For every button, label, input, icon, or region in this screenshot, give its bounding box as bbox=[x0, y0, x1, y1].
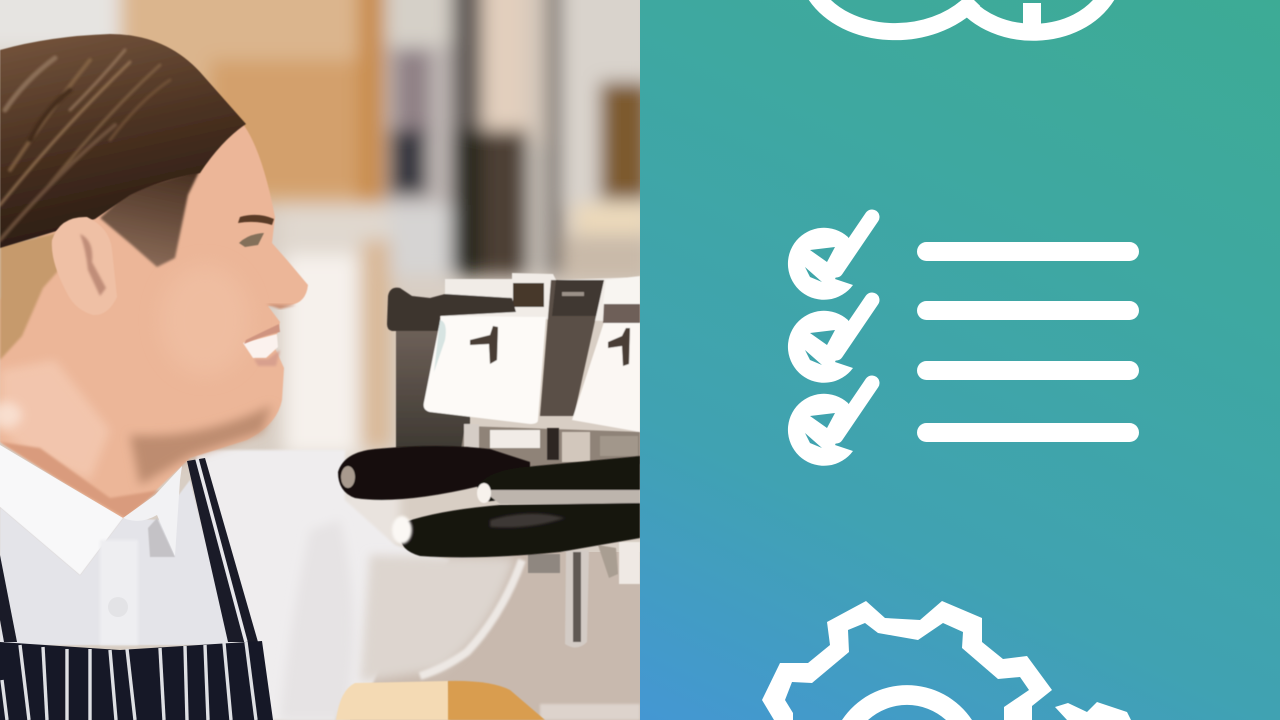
orange item at bottom bbox=[448, 681, 545, 720]
group heads bbox=[461, 426, 640, 468]
machine top chrome bbox=[445, 273, 640, 322]
goggle arcs bbox=[815, 0, 1108, 32]
icon: small gear fragment bbox=[1055, 702, 1131, 720]
icon: large gear cropped at bottom bbox=[762, 601, 1052, 720]
lower right tone bbox=[540, 704, 640, 720]
cream item at bottom bbox=[336, 681, 450, 720]
espresso machine bbox=[387, 273, 640, 468]
right collar bbox=[123, 466, 182, 556]
machine dark body bbox=[396, 328, 470, 448]
apron bib with pinstripes bbox=[0, 641, 273, 720]
gear hub ring bbox=[842, 685, 972, 720]
ear bbox=[52, 217, 117, 315]
small fittings bbox=[528, 554, 560, 573]
handle 2 bbox=[477, 456, 640, 502]
left collar bbox=[0, 445, 123, 575]
eye bbox=[239, 233, 264, 247]
icon: checklist with lines bbox=[788, 217, 1139, 466]
hair bbox=[0, 34, 246, 248]
barista figure bbox=[0, 34, 308, 720]
checklist lines bbox=[917, 242, 1139, 442]
portafilter handles bbox=[338, 446, 640, 557]
panel: photo of smiling barista at espresso machine bbox=[0, 0, 652, 720]
left apron strap bbox=[0, 555, 17, 642]
sleeve fold shading bbox=[360, 555, 515, 682]
face and neck bbox=[0, 124, 308, 520]
sideburn fade bbox=[100, 170, 200, 267]
dial right bbox=[608, 328, 630, 366]
eyebrow bbox=[238, 215, 274, 225]
placket bbox=[100, 540, 138, 645]
collar shadow bbox=[148, 518, 175, 557]
sleeve main bbox=[195, 450, 450, 720]
photo base tone bbox=[0, 0, 640, 720]
lower blond hair bbox=[0, 232, 58, 360]
neck highlight bbox=[0, 360, 110, 480]
panel: teal to blue gradient bbox=[640, 0, 1280, 720]
icon: cropped goggles outline at top bbox=[815, 0, 1108, 32]
goggle stem bbox=[1023, 3, 1041, 27]
jaw stubble bbox=[130, 405, 272, 485]
top knob and arm bbox=[387, 288, 516, 331]
nose shadow bbox=[266, 304, 296, 309]
spout bbox=[565, 550, 589, 648]
handle 1 bbox=[338, 446, 530, 500]
sleeve highlight curve bbox=[420, 560, 522, 676]
dial left bbox=[470, 326, 498, 364]
check item 1 bbox=[788, 217, 872, 300]
right apron strap bbox=[187, 458, 258, 642]
shirt front bbox=[0, 480, 232, 645]
neck shadow bbox=[0, 442, 160, 518]
chrome gap between handles bbox=[482, 490, 640, 504]
gear outline bbox=[762, 601, 1052, 720]
mouth and teeth bbox=[243, 334, 278, 358]
chrome panel left bbox=[424, 316, 546, 424]
check item 2 bbox=[788, 300, 872, 383]
grey-tan counter tone bbox=[374, 552, 640, 720]
check item 3 bbox=[788, 383, 872, 466]
center dark column bbox=[540, 280, 604, 416]
photo background: blurred cafe interior bbox=[0, 0, 652, 460]
portafilter spout and fittings bbox=[528, 542, 640, 648]
white shoulder light bbox=[344, 493, 402, 546]
shirt sleeve and counter bbox=[195, 450, 650, 720]
hair highlights bbox=[0, 50, 170, 240]
chrome panel right bbox=[572, 320, 640, 432]
handle 3 bbox=[400, 503, 640, 557]
cheek light bbox=[178, 284, 232, 356]
